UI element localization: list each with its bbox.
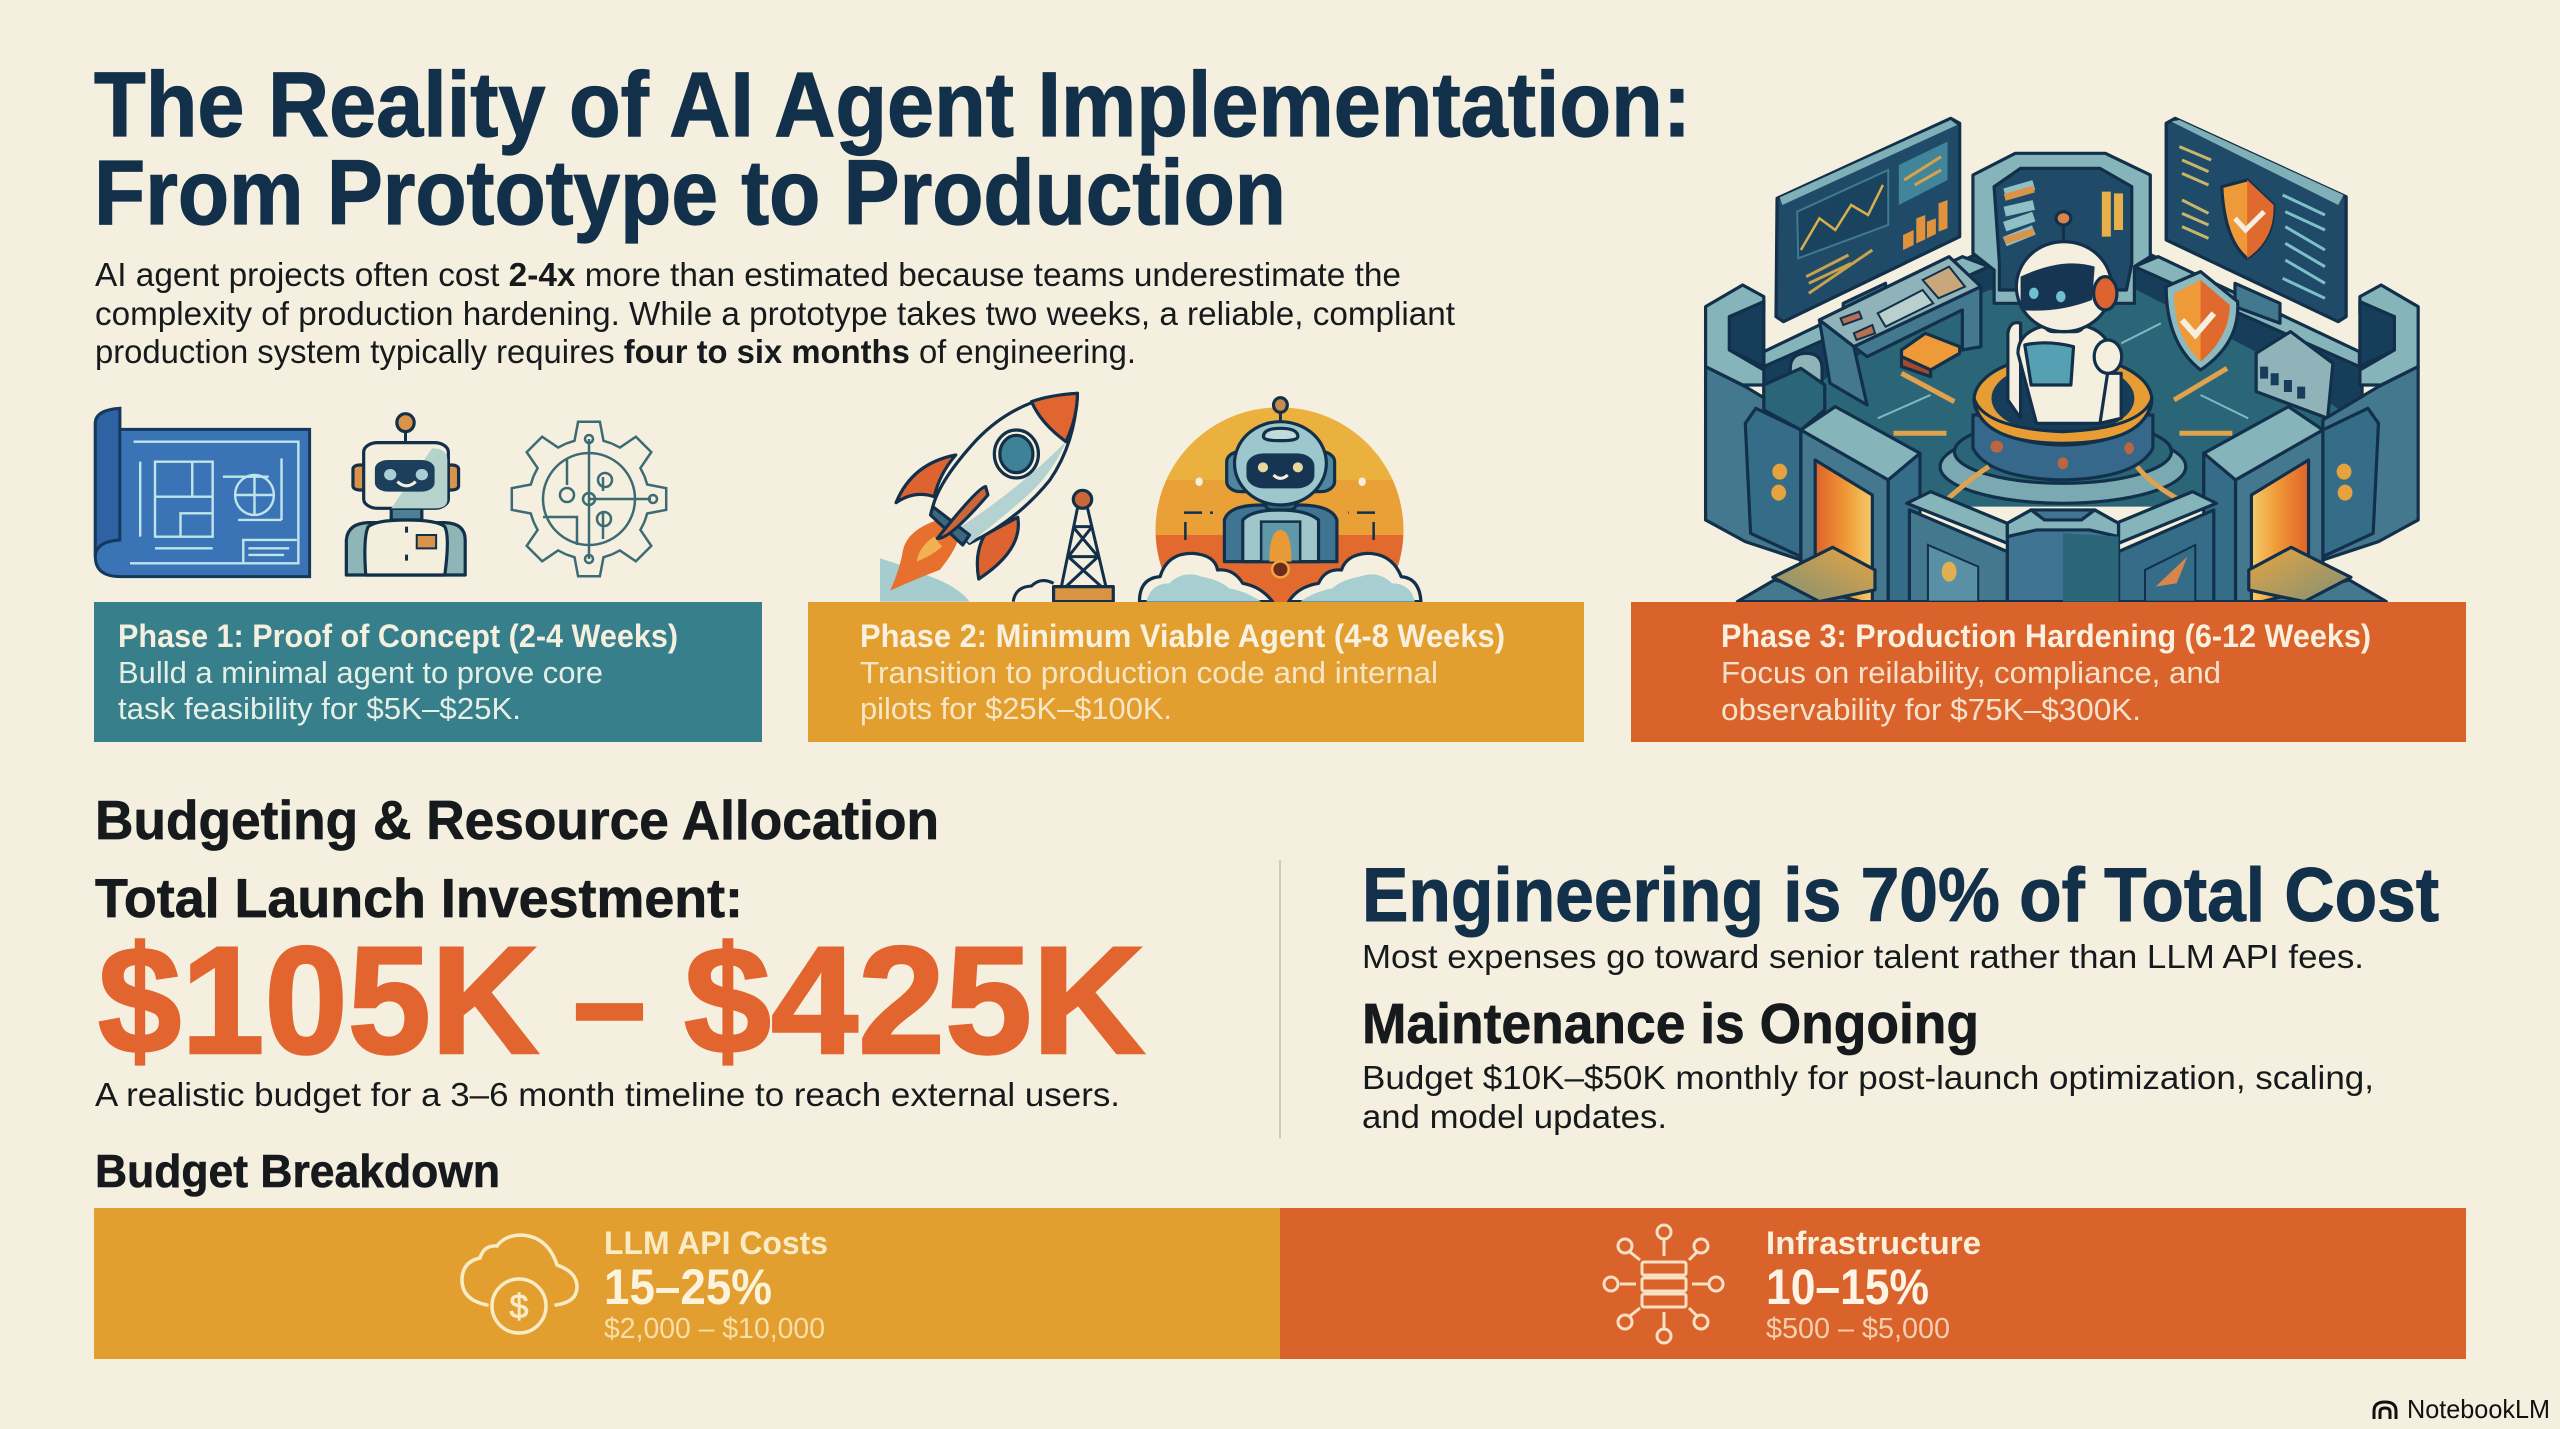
back walls and floor [1764,253,2362,507]
title [94,54,1691,244]
center back panel [1973,153,2150,303]
icon: rocket launch [880,393,1077,602]
icon: blueprint [95,408,310,577]
panel: LLM API costs: 15–25% [604,1259,772,1315]
front center pillar [1907,492,2216,602]
icon: simple robot [346,414,465,575]
panel: phase 1: Phase 1: Proof of Concept (2-4 Weeks) [118,618,678,654]
panel: phase 2: pilots for $25K–$100K. [860,691,1172,726]
big number: investment range: $425K [684,915,1145,1086]
icon: cloud with dollar coin [462,1235,577,1333]
panel: phase 3: observability for $75K–$300K. [1721,692,2141,727]
panel: LLM API costs [94,1208,1280,1359]
title: From Prototype to Production [94,142,1286,244]
intro paragraph [95,256,1455,370]
callout: maintenance [1362,992,2374,1135]
big number: investment range [98,915,1145,1086]
shield and right mesh box [2166,272,2333,418]
callout: maintenance: Maintenance is Ongoing [1362,992,1979,1056]
panel: infrastructure: 10–15% [1766,1259,1929,1315]
icon: circuit gear [512,422,666,576]
panel: phase 1: Bulld a minimal agent to prove core [118,655,603,690]
left monitor [1776,118,1960,323]
left machinery tower with furnace door [1706,285,1920,602]
icon: cloud with dollar coin: $ [510,1288,529,1326]
panel: phase 3 [1631,602,2466,742]
panel: infrastructure: Infrastructure [1766,1225,1981,1261]
heading: total launch investment: Total Launch Investment: [95,867,743,929]
panel: phase 1: task feasibility for $5K–$25K. [118,691,521,726]
watermark: NotebookLM: NotebookLM [2407,1394,2550,1424]
panel: phase 2: Phase 2: Minimum Viable Agent (4-8 Weeks) [860,618,1505,654]
heading: budget breakdown: Budget Breakdown [95,1145,500,1197]
big number: investment range: – [573,915,646,1086]
left console with keyboard [1790,257,1981,412]
panel: phase 2: Transition to production code and internal [860,655,1438,690]
panel: phase 1 [94,602,762,742]
right machinery tower with furnace door [2204,285,2418,602]
text: realistic budget: A realistic budget for a 3–6 month timeline to reach external users. [95,1076,1120,1113]
heading: budgeting and resource allocation: Budgeting & Resource Allocation [95,789,939,851]
icon: server network [1604,1225,1723,1343]
intro paragraph: production system typically requires four to six months of engineering. [95,333,1136,370]
central robot on platform [1940,212,2186,503]
panel: infrastructure [1280,1208,2466,1359]
callout: engineering cost: Engineering is 70% of Total Cost [1362,853,2439,938]
big number: investment range: $105K [98,915,539,1086]
panel: LLM API costs: LLM API Costs [604,1225,828,1261]
panel: LLM API costs: $2,000 – $10,000 [604,1313,825,1345]
icon: antenna tower [1013,490,1113,602]
right monitor [2166,118,2346,323]
title: The Reality of AI Agent Implementation: [94,54,1691,156]
panel: phase 3: Focus on reilability, compliance, and [1721,655,2221,690]
icon: robot with sun and clouds [1139,398,1421,605]
callout: engineering cost [1362,853,2439,975]
illustration: isometric production control room [1706,118,2418,602]
callout: maintenance: and model updates. [1362,1098,1667,1135]
panel: infrastructure: $500 – $5,000 [1766,1313,1950,1345]
panel: phase 3: Phase 3: Production Hardening (6-12 Weeks) [1721,618,2371,654]
intro paragraph: AI agent projects often cost 2-4x more than estimated because teams underestimate the [95,256,1401,293]
callout: engineering cost: Most expenses go toward senior talent rather than LLM API fees. [1362,938,2364,975]
callout: maintenance: Budget $10K–$50K monthly for post-launch optimization, scaling, [1362,1059,2374,1096]
intro paragraph: complexity of production hardening. While a prototype takes two weeks, a reliable, compliant [95,295,1455,332]
panel: phase 2 [808,602,1584,742]
